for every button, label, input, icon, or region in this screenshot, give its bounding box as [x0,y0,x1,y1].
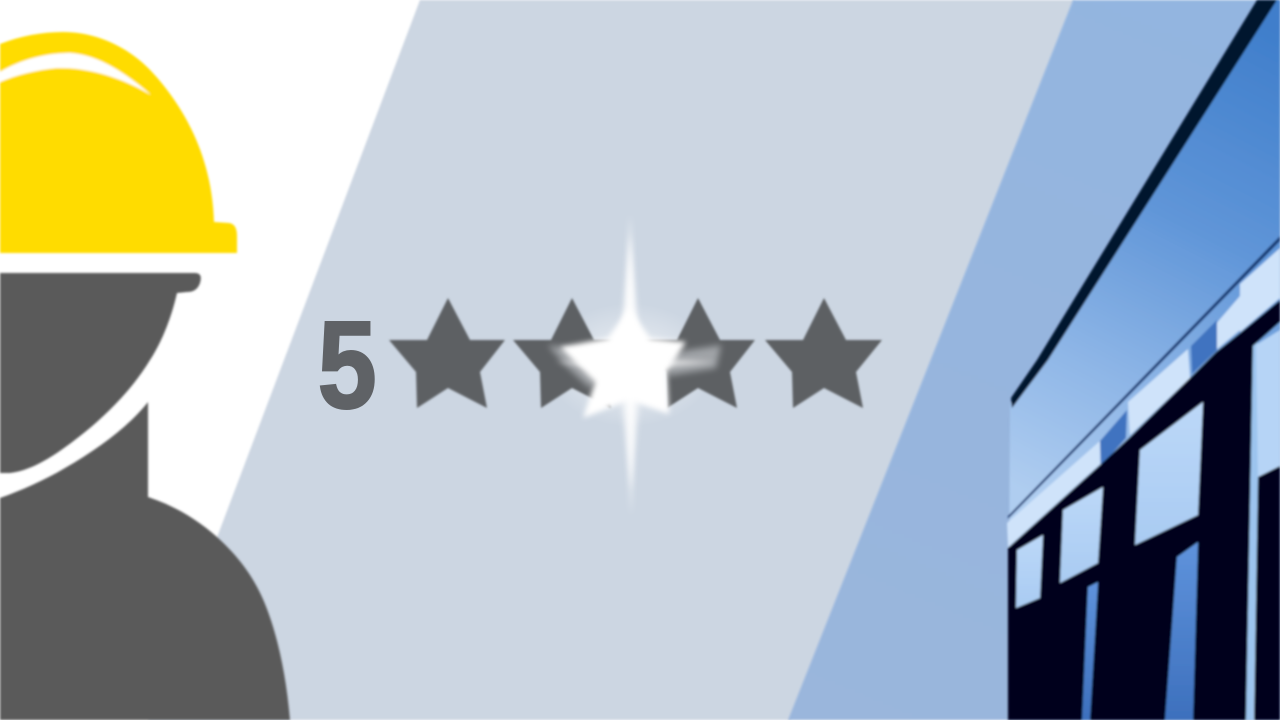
window band lit segments [1007,248,1280,547]
yellow hard hat [0,32,237,253]
thin fascia line [1008,236,1280,519]
sheen star 2 [548,345,600,388]
worker face [0,273,201,473]
rating: 5 stars [318,215,882,515]
hard hat highlight [0,53,151,95]
worker body and neck [0,402,290,720]
panel: pale grey-blue diagonal band [148,0,1075,720]
white star shape [560,308,686,418]
right dark column [1254,466,1280,720]
roof edge dark line [1011,0,1277,408]
soft halo behind stars [545,303,715,427]
outer vertical light streak [620,235,640,490]
panel: mid-blue diagonal band [788,0,1280,720]
pale window panes [1016,402,1203,608]
right pillar edge light strip [1246,342,1258,720]
vertical light streak [625,215,635,515]
star 1 [389,298,505,408]
photo: glass office building [1007,0,1280,720]
star 3 [639,298,755,408]
right window pane [1256,330,1280,478]
star 4 [765,298,882,408]
horizontal light streak [555,358,715,370]
window band blue segments [1100,320,1217,466]
sheen star 3 [667,345,721,376]
building glass facade [1008,0,1280,720]
star sparkle glare [555,215,715,515]
star 2 [513,298,629,408]
black lower facade and floor beam [1008,300,1280,720]
stars [389,298,882,408]
rating number: 5 [318,295,377,435]
icon: construction worker [0,32,290,720]
blue lower window slits [1082,542,1198,720]
light sheen on star 2 and star 3 [548,345,721,388]
